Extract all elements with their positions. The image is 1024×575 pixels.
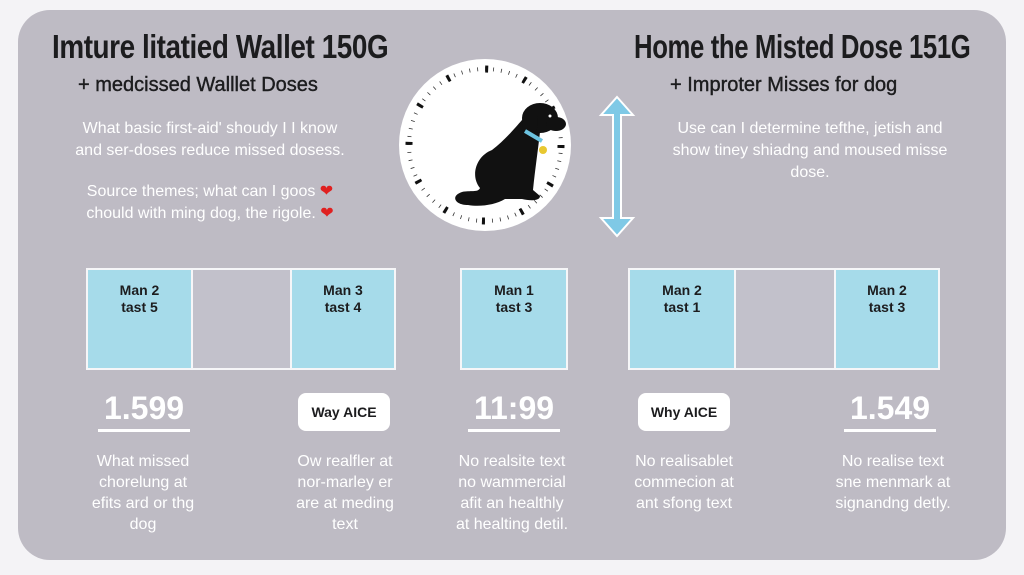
- number 3: 1.549: [850, 390, 930, 426]
- text col 4: ant sfong text: [636, 495, 732, 512]
- box group right: tast 1: [664, 299, 700, 315]
- subtitle right: + Improter Misses for dog: [670, 74, 897, 96]
- text block left 1: What basic first-aid' shoudy I I know: [83, 120, 337, 137]
- text col 3: no wammercial: [458, 474, 566, 491]
- box group right: tast 3: [869, 299, 905, 315]
- box group right: Man 2: [867, 282, 907, 298]
- text col 3: [456, 453, 568, 533]
- button 1: [298, 393, 390, 431]
- icon: clock with dog: [399, 59, 635, 238]
- text col 4: [634, 453, 734, 512]
- text col 1: efits ard or thg: [92, 495, 194, 512]
- text col 1: dog: [130, 516, 156, 533]
- text col 1: [92, 453, 194, 533]
- box group left: tast 5: [121, 299, 158, 315]
- text block right: [673, 120, 947, 181]
- box middle: tast 3: [496, 299, 532, 315]
- text col 2: Ow realfler at: [297, 453, 393, 470]
- text col 2: are at meding: [296, 495, 394, 512]
- box middle: Man 1: [494, 282, 534, 298]
- text block right: show tiney shiadng and moused misse: [673, 142, 947, 159]
- subtitle left: + medcissed Walllet Doses: [78, 74, 318, 96]
- number 2: 11:99: [474, 390, 554, 426]
- text col 2: [296, 453, 394, 533]
- text col 5: sne menmark at: [836, 474, 950, 491]
- text col 5: signandng detly.: [835, 495, 951, 512]
- text col 2: text: [332, 516, 358, 533]
- text block left 2: [86, 183, 334, 222]
- box group right: Man 2: [662, 282, 702, 298]
- number 1: 1.599: [104, 390, 184, 426]
- text block left 2: chould with ming dog, the rigole. ❤: [86, 205, 334, 222]
- text col 5: [835, 453, 951, 512]
- box group right: [628, 268, 940, 370]
- arrow: [601, 97, 633, 236]
- text col 1: chorelung at: [99, 474, 187, 491]
- text col 3: No realsite text: [459, 453, 565, 470]
- text block left 2: Source themes; what can I goos ❤: [87, 183, 333, 200]
- button 1: Way AICE: [311, 404, 377, 420]
- box group left: Man 2: [120, 282, 159, 298]
- text col 3: afit an healthly: [460, 495, 564, 512]
- text col 4: No realisablet: [635, 453, 733, 470]
- text col 5: No realise text: [842, 453, 944, 470]
- text col 3: at healting detil.: [456, 516, 568, 533]
- text block right: dose.: [790, 164, 830, 181]
- text block left 1: and ser-doses reduce missed dosess.: [75, 142, 345, 159]
- text col 1: What missed: [97, 453, 189, 470]
- box group left: tast 4: [325, 299, 361, 315]
- box group left: Man 3: [323, 282, 363, 298]
- button 2: [638, 393, 730, 431]
- box middle: [460, 268, 568, 370]
- button 2: Why AICE: [651, 404, 717, 420]
- box group left: [86, 268, 396, 370]
- text block right: Use can I determine tefthe, jetish and: [677, 120, 943, 137]
- title right: Home the Misted Dose 151G: [634, 28, 970, 65]
- text col 4: commecion at: [634, 474, 734, 491]
- text col 2: nor-marley er: [297, 474, 393, 491]
- text block left 1: [75, 120, 345, 159]
- title left: Imture litatied Wallet 150G: [52, 28, 388, 65]
